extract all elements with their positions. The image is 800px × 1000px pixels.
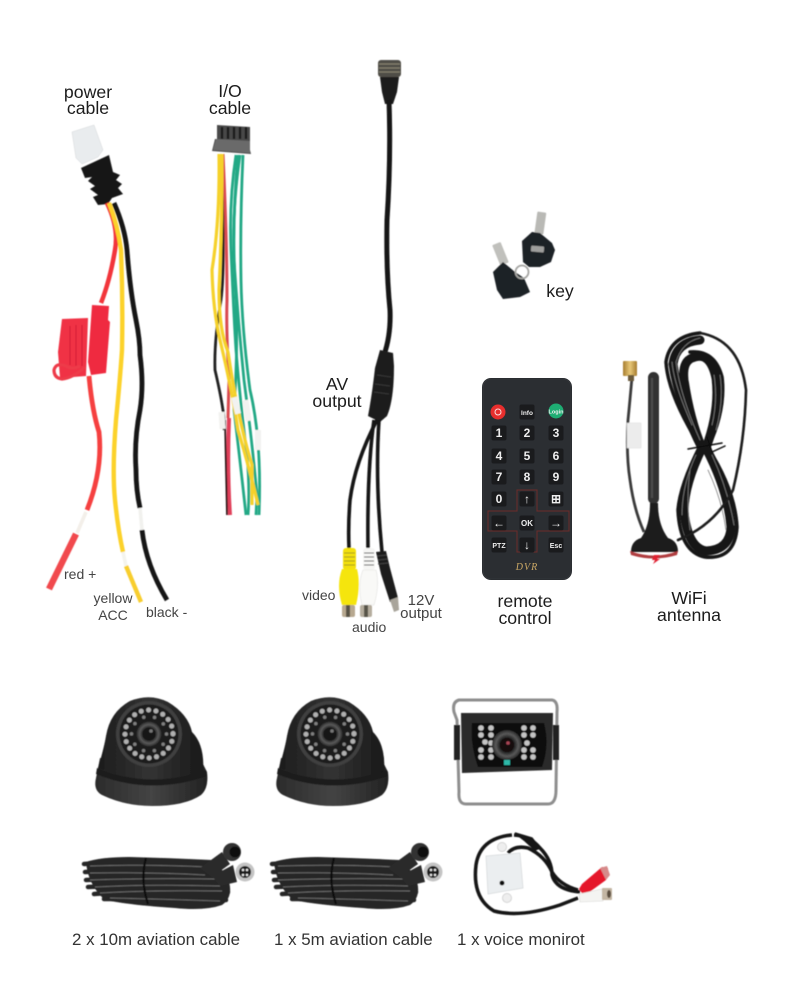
cursor pad outline (488, 490, 569, 552)
label: remote control: remote (497, 591, 553, 611)
wire: black (114, 203, 167, 600)
caption: 1 x 5m aviation cable: 1 x 5m aviation cable (274, 930, 433, 949)
button labels: 0 (496, 492, 503, 506)
label: black -: black - (146, 604, 188, 620)
white RCA (579, 888, 612, 902)
label: video: video (302, 587, 336, 603)
wire: yellow (109, 203, 141, 602)
login button (548, 404, 564, 418)
button labels: → (550, 516, 562, 530)
remote control (482, 378, 572, 580)
wires: green (231, 155, 260, 515)
molded splitter (368, 350, 394, 422)
label: AV output: AV (326, 374, 348, 394)
label: AV output: output (312, 391, 362, 411)
key: left (492, 242, 530, 299)
power cable (49, 125, 167, 602)
dome camera 2 (276, 697, 388, 806)
cable loop (475, 833, 580, 913)
button labels: 9 (553, 470, 560, 484)
label: 12V output (400, 592, 443, 622)
IR LEDs (478, 725, 536, 760)
button labels: PTZ (492, 543, 506, 550)
wire: red with fuse (49, 203, 116, 589)
bracket (454, 700, 557, 804)
wires: yellow (212, 154, 258, 505)
connector: aviation plug (378, 60, 401, 77)
WiFi antenna (623, 333, 746, 564)
connector: white plug (72, 125, 103, 164)
white box (486, 842, 523, 902)
power button (490, 404, 506, 420)
label: 12V output: 12V (408, 592, 434, 609)
button labels: ⊞ (551, 492, 561, 506)
label: remote control: control (498, 608, 552, 628)
label: power cable (64, 82, 112, 118)
label: audio: audio (352, 619, 386, 635)
label: yellow ACC (94, 590, 133, 623)
button labels: Esc (550, 543, 562, 550)
aviation cable 10m (84, 843, 254, 909)
info button: Info (521, 410, 533, 417)
wires: red and black (215, 154, 230, 515)
aviation cable 5m (272, 843, 442, 909)
branch cables (349, 420, 382, 552)
dome camera 1 (95, 697, 207, 806)
DVR logo: DVR (515, 562, 538, 573)
voice monitor (475, 833, 612, 913)
button labels: 2 (524, 426, 531, 440)
login button: Login (549, 410, 564, 416)
label: AV output (312, 374, 362, 411)
label: power cable: power (64, 82, 112, 102)
label: power cable: cable (67, 98, 109, 118)
connector: black boot (81, 155, 123, 205)
button labels: 5 (524, 449, 531, 463)
whip and magnetic base (630, 372, 678, 564)
button labels: 1 (496, 426, 503, 440)
label: yellow ACC: yellow (94, 590, 133, 606)
button labels: 6 (553, 449, 560, 463)
AV output cable (339, 60, 401, 617)
button labels: ↓ (524, 538, 530, 552)
label: remote control (497, 591, 553, 628)
label: WiFi antenna: antenna (657, 605, 721, 625)
connector: yellow RCA (339, 548, 359, 617)
label: WiFi antenna (657, 588, 721, 625)
info button (520, 404, 534, 420)
label: I/O cable (209, 81, 251, 118)
indicator (504, 760, 510, 765)
body (461, 713, 553, 773)
button labels: ← (493, 516, 505, 530)
caption: 1 x voice monirot: 1 x voice monirot (457, 930, 585, 949)
lens (492, 730, 522, 760)
label: I/O cable: cable (209, 98, 251, 118)
I/O cable (212, 125, 261, 515)
caption: 2 x 10m aviation cable: 2 x 10m aviation cable (72, 930, 240, 949)
red RCA (579, 866, 610, 896)
button labels: 8 (524, 470, 531, 484)
connector (212, 125, 251, 154)
button labels: 4 (496, 449, 503, 463)
bullet camera (454, 700, 559, 804)
key: right (522, 212, 555, 267)
coiled cable (666, 333, 746, 557)
keys (492, 212, 555, 299)
button labels: OK (521, 519, 533, 528)
button labels: 3 (553, 426, 560, 440)
number and navigation buttons (492, 426, 564, 552)
main cable (384, 100, 390, 355)
connector: 12V DC barrel (376, 551, 399, 612)
label: yellow ACC: ACC (98, 607, 128, 623)
button labels: ↑ (524, 492, 530, 506)
label: WiFi antenna: WiFi (671, 588, 707, 608)
connector: white RCA (360, 548, 378, 617)
SMA connector and lead (623, 361, 644, 532)
label: 12V output: output (400, 605, 443, 622)
label: I/O cable: I/O (218, 81, 242, 101)
button labels (492, 426, 562, 552)
wire tags (218, 397, 261, 450)
button labels: 7 (496, 470, 503, 484)
label: red +: red + (64, 566, 96, 582)
label: key: key (546, 281, 574, 301)
